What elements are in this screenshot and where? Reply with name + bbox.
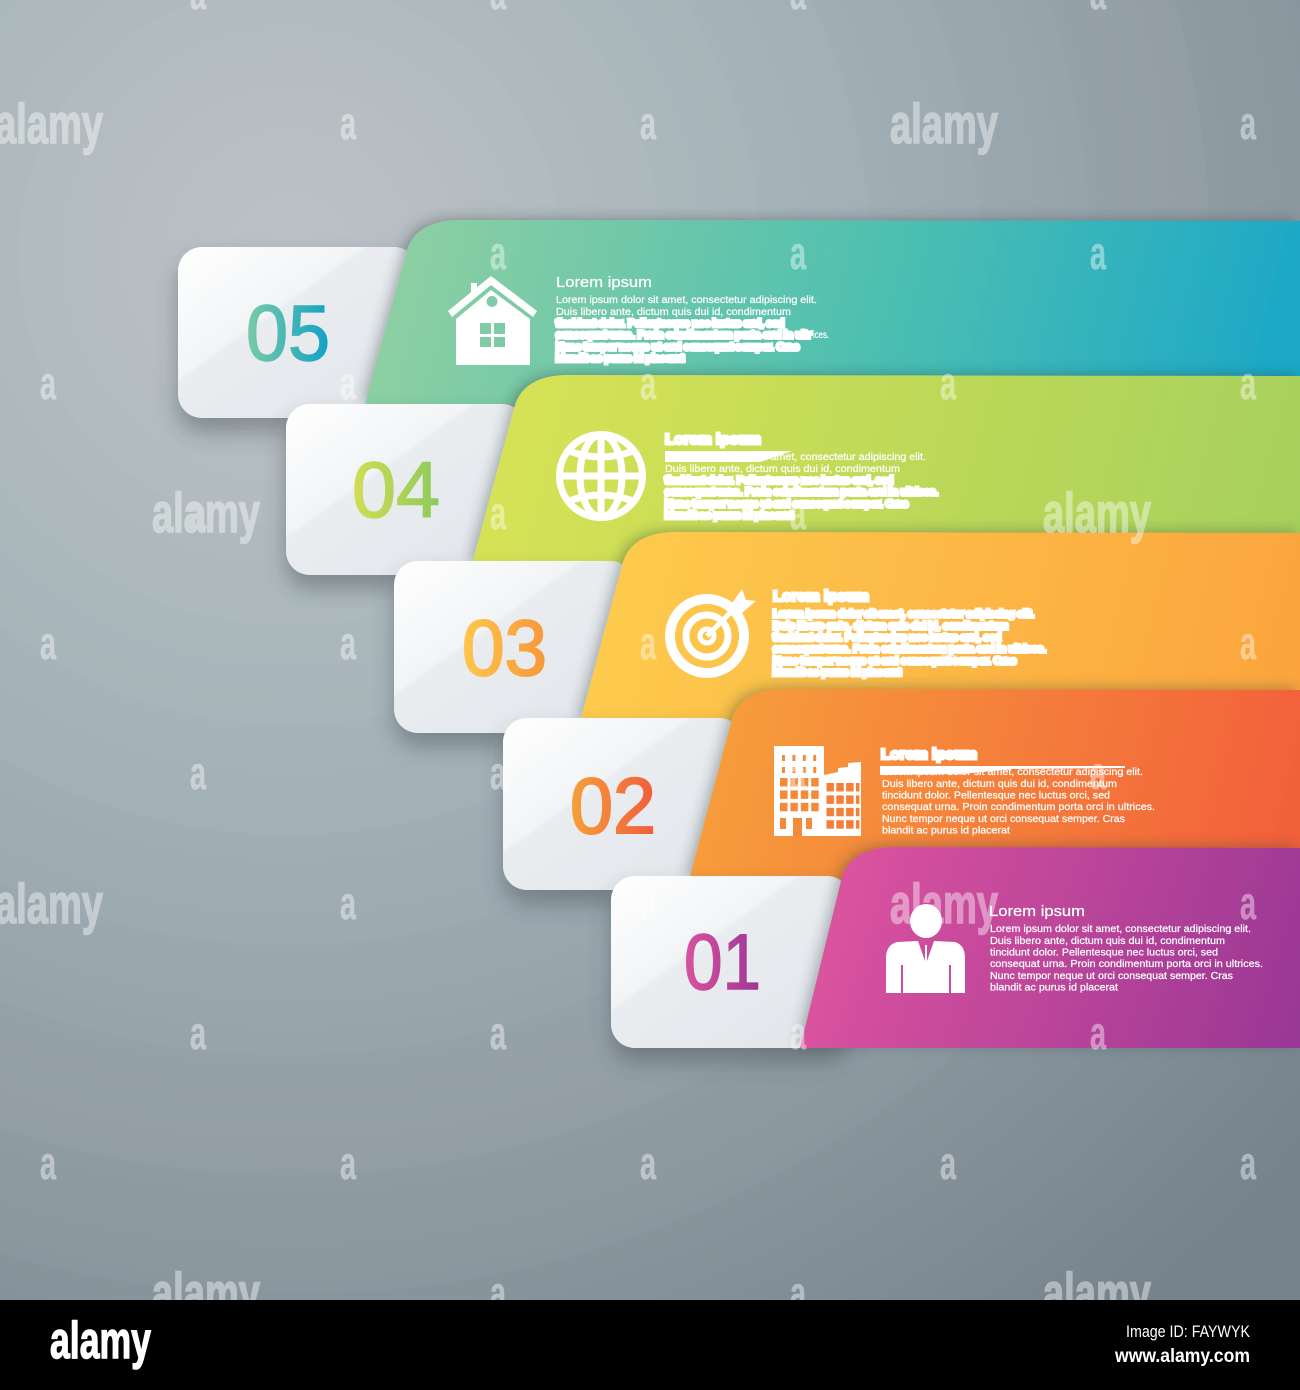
text block 04: Nunc tempor neque ut orci consequat semper. Cras <box>665 498 908 510</box>
watermarks: a <box>190 487 206 539</box>
text block 02: Lorem ipsum dolor sit amet, consectetur adipiscing elit. <box>882 766 1143 778</box>
text block 01: consequat urna. Proin condimentum porta orci in ultrices. <box>990 958 1263 970</box>
watermarks: a <box>790 487 806 539</box>
text block 03: Duis libero ante, dictum quis dui id, condimentum <box>773 620 1008 632</box>
watermarks: a <box>40 1137 56 1189</box>
watermarks: a <box>1090 227 1106 279</box>
watermarks: a <box>190 1007 206 1059</box>
image id: Image ID: FAYWYK <box>1126 1322 1251 1341</box>
watermarks: a <box>1090 1007 1106 1059</box>
footer bar <box>0 1300 1300 1390</box>
watermarks: a <box>340 1137 356 1189</box>
watermarks: a <box>940 1137 956 1189</box>
watermarks: alamy <box>152 1261 260 1324</box>
text block 02: blandit ac purus id placerat <box>882 824 1010 836</box>
text block 01: Lorem ipsum <box>989 903 1085 920</box>
text block 01: Nunc tempor neque ut orci consequat semper. Cras <box>990 970 1233 982</box>
text block 03: blandit ac purus id placerat <box>773 666 901 678</box>
card 01 <box>611 876 851 1048</box>
text block 03 <box>773 588 1046 678</box>
text block 05: tincidunt dolor. Pellentesque nec luctus orci, sed <box>556 318 784 330</box>
watermarks: a <box>790 747 806 799</box>
watermarks: a <box>490 1267 506 1319</box>
watermarks: a <box>640 617 656 669</box>
watermarks: a <box>340 357 356 409</box>
text block 02: tincidunt dolor. Pellentesque nec luctus orci, sed <box>882 790 1110 802</box>
watermarks: a <box>190 747 206 799</box>
band 02 <box>689 689 1300 880</box>
watermarks: a <box>1240 1137 1256 1189</box>
text block 05: blandit ac purus id placerat <box>556 352 684 364</box>
card 05 <box>178 247 418 418</box>
text block 03: Lorem ipsum dolor sit amet, consectetur adipiscing elit. <box>773 608 1034 620</box>
footer logo: alamy <box>50 1312 151 1370</box>
band 03 <box>580 532 1300 722</box>
text block 05: ices. <box>813 329 829 341</box>
watermarks: alamy <box>1043 1261 1151 1324</box>
watermarks: a <box>790 1007 806 1059</box>
text block 04: Lorem ipsum dolor sit amet, consectetur adipiscing elit. <box>665 451 926 463</box>
card 04 <box>286 404 526 575</box>
watermarks: a <box>1090 747 1106 799</box>
watermarks: a <box>490 1007 506 1059</box>
icon: business person <box>886 904 965 993</box>
text block 01: blandit ac purus id placerat <box>990 982 1118 994</box>
text block 04: Lorem ipsum <box>665 431 761 448</box>
text block 02 <box>880 746 1155 836</box>
panel: step 01 <box>611 847 1300 1048</box>
watermarks: a <box>1240 617 1256 669</box>
watermarks: a <box>490 227 506 279</box>
text block 04: consequat urna. Proin condimentum porta orci in ultrices. <box>665 486 938 498</box>
text block 02: consequat urna. Proin condimentum porta orci in ultrices. <box>882 801 1155 813</box>
text block 02: Lorem ipsum <box>881 746 977 763</box>
text block 04: tincidunt dolor. Pellentesque nec luctus orci, sed <box>665 474 893 486</box>
text block 05: Lorem ipsum <box>556 274 652 291</box>
watermarks: alamy <box>1043 481 1151 544</box>
text block 03: Nunc tempor neque ut orci consequat semper. Cras <box>773 655 1016 667</box>
panel: step 05 <box>178 220 1300 418</box>
text block 01 <box>989 903 1263 994</box>
panel: step 02 <box>503 689 1300 890</box>
band 05 <box>365 220 1300 404</box>
text block 04: blandit ac purus id placerat <box>665 510 793 522</box>
watermarks: a <box>640 877 656 929</box>
number 04: 04 <box>352 445 440 534</box>
text block 03: consequat urna. Proin condimentum porta orci in ultrices. <box>773 643 1046 655</box>
text block 03: Lorem ipsum <box>773 588 869 605</box>
text block 05: Lorem ipsum dolor sit amet, consectetur adipiscing elit. <box>556 294 817 306</box>
text block 05 <box>556 274 829 364</box>
icon: globe <box>559 434 643 518</box>
watermarks: alamy <box>890 92 998 155</box>
watermarks: a <box>490 487 506 539</box>
watermarks: a <box>340 97 356 149</box>
watermarks: a <box>40 617 56 669</box>
text block 03: tincidunt dolor. Pellentesque nec luctus orci, sed <box>773 632 1001 644</box>
band 01 <box>800 847 1300 1048</box>
band 04 <box>472 375 1300 564</box>
icon: target <box>670 589 756 673</box>
watermarks: a <box>490 747 506 799</box>
icon: house <box>448 276 537 365</box>
text block 05: Duis libero ante, dictum quis dui id, condimentum <box>556 306 791 318</box>
text block 01: Lorem ipsum dolor sit amet, consectetur adipiscing elit. <box>990 923 1251 935</box>
number 02: 02 <box>570 761 656 850</box>
watermarks: a <box>790 227 806 279</box>
panel: step 04 <box>286 375 1300 575</box>
card 02 <box>503 718 743 890</box>
watermarks: a <box>1240 97 1256 149</box>
text block 05: consequat urna. Proin condimentum porta orci in ultr <box>556 329 812 341</box>
watermarks: alamy <box>152 481 260 544</box>
text block 04: Duis libero ante, dictum quis dui id, condimentum <box>665 463 900 475</box>
website: www.alamy.com <box>1114 1346 1250 1367</box>
watermarks: a <box>790 1267 806 1319</box>
text block 05: Nunc tempor neque ut orci consequat semper. Cras <box>556 341 799 353</box>
watermarks: a <box>640 97 656 149</box>
watermarks: a <box>640 1137 656 1189</box>
text block 04 <box>665 431 938 522</box>
watermarks: a <box>40 357 56 409</box>
panel: step 03 <box>394 532 1300 733</box>
watermarks: a <box>1240 877 1256 929</box>
watermarks: a <box>940 617 956 669</box>
number 05: 05 <box>246 288 330 377</box>
card 03 <box>394 561 634 733</box>
text block 01: Duis libero ante, dictum quis dui id, condimentum <box>990 935 1225 947</box>
watermarks: a <box>940 357 956 409</box>
watermarks: a <box>640 357 656 409</box>
watermarks: a <box>340 617 356 669</box>
text block 01: tincidunt dolor. Pellentesque nec luctus orci, sed <box>990 946 1218 958</box>
icon: office buildings <box>774 746 861 836</box>
text block 02: Duis libero ante, dictum quis dui id, condimentum <box>882 778 1117 790</box>
number 01: 01 <box>684 917 761 1006</box>
text block 02: Nunc tempor neque ut orci consequat semper. Cras <box>882 813 1125 825</box>
number 03: 03 <box>462 603 547 692</box>
watermarks: alamy <box>890 872 998 935</box>
watermarks: a <box>340 877 356 929</box>
watermarks: a <box>1240 357 1256 409</box>
